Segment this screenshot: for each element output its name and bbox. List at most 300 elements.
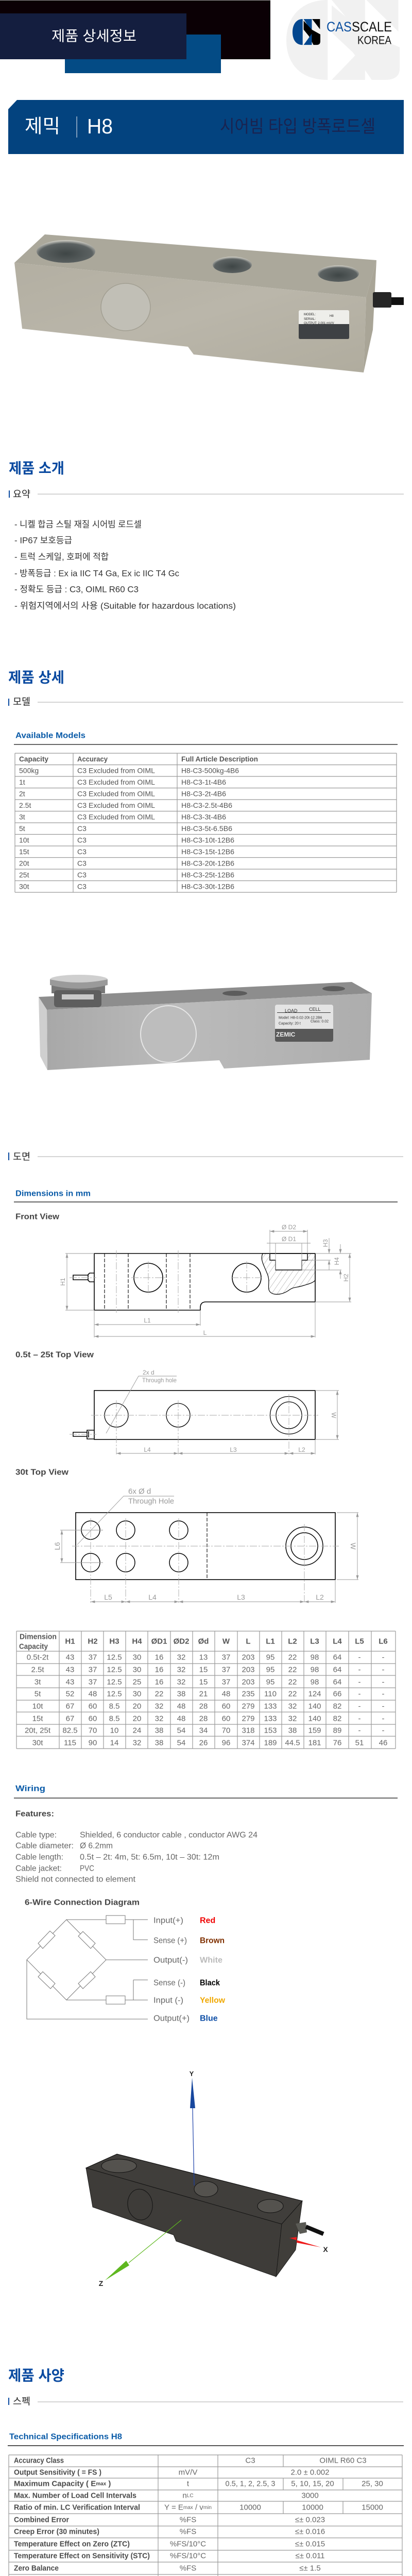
units column: Y = Emax / vmin bbox=[164, 2503, 212, 2512]
front view label: Front View bbox=[15, 1213, 60, 1221]
row 3t: 15 bbox=[199, 1677, 208, 1687]
table rows: H8-C3-2.5t-4B6 bbox=[181, 801, 232, 809]
cable features list: Cable type: bbox=[15, 1831, 57, 1839]
wire colours: Black bbox=[200, 1978, 220, 1988]
row 15t: 140 bbox=[308, 1715, 321, 1723]
row 15t: 20 bbox=[133, 1715, 141, 1723]
table rows: C3 Excluded from OIML bbox=[77, 813, 155, 821]
dimension lines bbox=[60, 1513, 358, 1603]
centre lines bbox=[70, 1250, 263, 1313]
logo korea: KOREA bbox=[357, 34, 391, 46]
row 10t: 20 bbox=[133, 1702, 141, 1710]
summary bullet list: - 니켈 합금 스틸 재질 시어빔 로드셀 bbox=[14, 519, 142, 530]
row 30t: 14 bbox=[110, 1738, 118, 1748]
units column: %FS/10°C bbox=[170, 2551, 206, 2561]
row 20t, 25t: 38 bbox=[288, 1726, 297, 1735]
row 5t: 52 bbox=[66, 1690, 74, 1698]
hidden line bbox=[207, 1513, 208, 1580]
cable features list: Ø 6.2mm bbox=[80, 1841, 113, 1851]
row 10t: 28 bbox=[199, 1702, 208, 1710]
row 15t: 133 bbox=[264, 1715, 277, 1723]
row labels: Temperature Effect on Zero (ZTC) bbox=[14, 2540, 130, 2548]
wire colours: Red bbox=[200, 1917, 215, 1925]
row 3t: 37 bbox=[222, 1677, 230, 1687]
table rows: 500kg bbox=[19, 767, 39, 775]
nameplate: OUTPUT: 2.001 mV/V bbox=[304, 322, 334, 325]
holes bbox=[81, 1521, 323, 1572]
values column: 2.0 ± 0.002 bbox=[291, 2468, 329, 2477]
row 10t: 60 bbox=[222, 1702, 230, 1710]
subheading: summary: 요약 bbox=[13, 488, 30, 500]
dimension labels: H4 bbox=[333, 1257, 340, 1265]
wire colours: Yellow bbox=[200, 1996, 226, 2005]
row 0.5t-2t: 22 bbox=[288, 1653, 297, 1662]
dimension labels: L4 bbox=[144, 1446, 151, 1453]
row 10t: 67 bbox=[66, 1702, 74, 1710]
company logo bbox=[293, 19, 392, 46]
nameplate: H8 bbox=[330, 315, 334, 318]
row 0.5t-2t: 12.5 bbox=[107, 1653, 122, 1662]
nameplate: SERIAL: bbox=[304, 318, 316, 321]
6-wire connection diagram bbox=[27, 1916, 226, 2023]
cable features list bbox=[15, 1831, 258, 1884]
dimension lines bbox=[315, 1391, 339, 1454]
row 5t: 48 bbox=[222, 1690, 230, 1698]
dimension labels: L1 bbox=[144, 1317, 151, 1324]
technical specifications table bbox=[9, 2455, 402, 2576]
holes bbox=[37, 240, 359, 282]
header row bbox=[19, 1632, 388, 1651]
row 2.5t: - bbox=[358, 1665, 360, 1674]
table rows: C3 bbox=[77, 824, 87, 833]
table rows: H8-C3-20t-12B6 bbox=[181, 859, 234, 868]
X axis arrow: X bbox=[323, 2245, 328, 2253]
row 0.5t-2t bbox=[27, 1653, 384, 1662]
row 30t: 115 bbox=[64, 1738, 76, 1748]
row 3t: 22 bbox=[288, 1677, 297, 1687]
row 30t: 76 bbox=[333, 1738, 341, 1748]
row 5t: 48 bbox=[89, 1690, 97, 1698]
table rows: 10t bbox=[19, 836, 29, 844]
row 10t: 32 bbox=[155, 1702, 163, 1710]
row 5t: 5t bbox=[35, 1690, 41, 1698]
cable features list: Cable jacket: bbox=[15, 1864, 62, 1873]
dimension labels: H3 bbox=[322, 1239, 329, 1247]
row 20t, 25t: 34 bbox=[199, 1726, 208, 1735]
cable features list: 0.5t – 2t: 4m, 5t: 6.5m, 10t – 30t: 12m bbox=[80, 1853, 219, 1862]
row 0.5t-2t: 43 bbox=[66, 1653, 74, 1662]
row 15t: 15t bbox=[32, 1715, 43, 1723]
wire labels: Sense (+) bbox=[153, 1936, 187, 1945]
row 3t: - bbox=[358, 1677, 360, 1687]
table rows: 30t bbox=[19, 882, 29, 890]
row 15t: - bbox=[382, 1715, 384, 1723]
values column: 10000 bbox=[239, 2503, 261, 2512]
values column: ≤± 0.023 bbox=[295, 2515, 325, 2524]
row 0.5t-2t: 64 bbox=[333, 1653, 341, 1662]
row 2.5t: 64 bbox=[333, 1665, 341, 1674]
features heading: Features: bbox=[15, 1809, 54, 1819]
dimensions heading: Dimensions in mm bbox=[15, 1189, 91, 1198]
row 15t: 32 bbox=[155, 1715, 163, 1723]
body outline bbox=[76, 1513, 335, 1580]
units column: nLC bbox=[182, 2492, 194, 2500]
strain cover bbox=[141, 1006, 196, 1062]
row 0.5t-2t: 32 bbox=[177, 1653, 185, 1662]
row 20t, 25t: 10 bbox=[110, 1726, 118, 1735]
block right face bbox=[276, 2201, 302, 2277]
row 15t: 32 bbox=[288, 1715, 297, 1723]
cable features list: Shield not connected to element bbox=[15, 1875, 136, 1884]
row 20t, 25t: 318 bbox=[242, 1726, 255, 1735]
summary bullet list: - 위험지역에서의 사용 (Suitable for hazardous locations) bbox=[14, 601, 236, 611]
units column: %FS/10°C bbox=[170, 2540, 206, 2548]
row 2.5t: 32 bbox=[177, 1665, 185, 1674]
row 30t: 54 bbox=[177, 1738, 185, 1748]
available models heading: Available Models bbox=[15, 732, 85, 740]
subheading: model: 모델 bbox=[13, 697, 30, 707]
row 2.5t: 43 bbox=[66, 1665, 74, 1674]
row 20t, 25t: - bbox=[358, 1726, 360, 1735]
row labels: Output Sensitivity ( = FS ) bbox=[14, 2468, 101, 2477]
table rows: H8-C3-15t-12B6 bbox=[181, 848, 234, 856]
row 5t: 30 bbox=[133, 1690, 141, 1698]
row 15t: 67 bbox=[66, 1715, 74, 1723]
row 30t: 189 bbox=[264, 1738, 277, 1748]
cable features list: Shielded, 6 conductor cable , conductor AWG 24 bbox=[80, 1831, 258, 1839]
body outline bbox=[94, 1253, 315, 1310]
strain cover outline bbox=[126, 2188, 154, 2222]
values column: 25, 30 bbox=[362, 2479, 383, 2488]
dimension labels bbox=[53, 1487, 357, 1601]
row 10t: 140 bbox=[308, 1702, 321, 1710]
values column: ≤± 0.011 bbox=[295, 2551, 325, 2561]
row 10t: 32 bbox=[288, 1702, 297, 1710]
model name: H8 bbox=[87, 114, 113, 138]
nameplate: Class: 0.02 bbox=[311, 1020, 329, 1023]
row 10t bbox=[32, 1702, 384, 1710]
table header: Full Article Description bbox=[181, 755, 258, 763]
dimension labels: W bbox=[349, 1543, 357, 1550]
product photo: grayscale load cell with pin bbox=[39, 975, 372, 1070]
values column bbox=[220, 2456, 401, 2576]
table rows: H8-C3-500kg-4B6 bbox=[181, 767, 239, 775]
row 10t: 8.5 bbox=[109, 1702, 119, 1710]
hatched section bbox=[262, 1253, 315, 1294]
dimension labels: 6x Ø d bbox=[128, 1487, 151, 1496]
nameplate: MODEL: bbox=[304, 313, 316, 316]
summary bullet list bbox=[14, 519, 236, 611]
Z axis arrow bbox=[99, 2220, 181, 2287]
row 15t: 60 bbox=[222, 1715, 230, 1723]
dimension labels: H2 bbox=[342, 1274, 350, 1282]
row 20t, 25t: 70 bbox=[89, 1726, 97, 1735]
row 20t, 25t: 153 bbox=[264, 1726, 277, 1735]
leader bbox=[77, 1496, 174, 1545]
header row: L4 bbox=[333, 1637, 342, 1646]
block top face bbox=[86, 2154, 302, 2224]
values column: ≤± 0.016 bbox=[295, 2528, 325, 2536]
0.5t-25t top view drawing bbox=[70, 1369, 339, 1454]
row 3t bbox=[35, 1677, 384, 1687]
row 15t: 82 bbox=[333, 1715, 341, 1723]
row labels: Ratio of min. LC Verification Interval bbox=[14, 2503, 140, 2512]
row 30t: 38 bbox=[155, 1738, 163, 1748]
dimension labels: L bbox=[203, 1329, 207, 1336]
nameplate: ZEMIC bbox=[276, 1031, 296, 1038]
holes bbox=[105, 1396, 308, 1434]
wire labels: Output(+) bbox=[153, 2014, 190, 2023]
nameplate: LOAD bbox=[285, 1008, 298, 1013]
wire labels: Sense (-) bbox=[153, 1978, 185, 1988]
table header bbox=[19, 755, 258, 763]
row 20t, 25t: 82.5 bbox=[62, 1726, 78, 1735]
row 3t: 12.5 bbox=[107, 1677, 122, 1687]
table rows: C3 bbox=[77, 871, 87, 879]
dimension labels bbox=[142, 1369, 337, 1453]
counterbore bbox=[270, 1253, 307, 1270]
row 3t: - bbox=[382, 1677, 384, 1687]
row 3t: 32 bbox=[177, 1677, 185, 1687]
nameplate: Model: H8-0.02-20t-12.2B6 bbox=[279, 1016, 322, 1020]
header row: H2 bbox=[88, 1637, 98, 1646]
leader bbox=[106, 1376, 177, 1433]
row labels: Maximum Capacity ( Emax ) bbox=[14, 2479, 111, 2488]
0.5t-25t top view label: 0.5t – 25t Top View bbox=[15, 1351, 94, 1359]
row 2.5t bbox=[31, 1665, 384, 1674]
table rows: 2t bbox=[19, 789, 25, 798]
table rows: 20t bbox=[19, 859, 29, 868]
Y axis arrow bbox=[190, 2070, 195, 2185]
row 3t: 25 bbox=[133, 1677, 141, 1687]
holes bbox=[222, 986, 345, 996]
dimension labels: 2x d bbox=[143, 1369, 154, 1376]
table rows: C3 Excluded from OIML bbox=[77, 801, 155, 809]
centre lines bbox=[70, 1394, 318, 1454]
table rows: C3 Excluded from OIML bbox=[77, 789, 155, 798]
top face bbox=[39, 982, 372, 1010]
front face bbox=[47, 993, 372, 1070]
row 2.5t: - bbox=[382, 1665, 384, 1674]
row 5t: 22 bbox=[155, 1690, 163, 1698]
row 15t: 8.5 bbox=[109, 1715, 119, 1723]
summary bullet list: - 트럭 스케일, 호퍼에 적합 bbox=[14, 552, 109, 562]
hidden lines bbox=[105, 1253, 190, 1310]
6-wire diagram heading: 6-Wire Connection Diagram bbox=[25, 1898, 140, 1907]
units column: mV/V bbox=[179, 2468, 197, 2477]
row 0.5t-2t: - bbox=[358, 1653, 360, 1662]
row 0.5t-2t: 203 bbox=[242, 1653, 255, 1662]
row 5t: - bbox=[382, 1690, 384, 1698]
row 30t: 32 bbox=[133, 1738, 141, 1748]
header banner bbox=[0, 0, 270, 73]
table header: Accuracy bbox=[77, 755, 108, 763]
header row: L2 bbox=[288, 1637, 297, 1646]
values column: 0.5, 1, 2, 2.5, 3 bbox=[226, 2479, 275, 2488]
row 0.5t-2t: 95 bbox=[266, 1653, 274, 1662]
row 15t: - bbox=[358, 1715, 360, 1723]
values column: ≤± 1.5 bbox=[299, 2564, 321, 2573]
3D axis model bbox=[86, 2070, 328, 2287]
row 3t: 3t bbox=[35, 1677, 41, 1687]
subtitle: 시어빔 타입 방폭로드셀 bbox=[220, 117, 375, 137]
block front face bbox=[86, 2168, 282, 2277]
row 20t, 25t: 20t, 25t bbox=[25, 1726, 51, 1735]
30t top view label: 30t Top View bbox=[15, 1468, 69, 1477]
X axis arrow bbox=[289, 2237, 328, 2253]
table rows: H8-C3-5t-6.5B6 bbox=[181, 824, 232, 833]
row 3t: 64 bbox=[333, 1677, 341, 1687]
header row: L6 bbox=[379, 1637, 388, 1646]
left face bbox=[39, 997, 47, 1070]
Y axis arrow: Y bbox=[190, 2070, 194, 2077]
row 10t: 48 bbox=[177, 1702, 185, 1710]
header row: L3 bbox=[310, 1637, 319, 1646]
header row: ØD1 bbox=[151, 1637, 167, 1646]
values column: ≤± 0.015 bbox=[295, 2540, 325, 2548]
table rows: 25t bbox=[19, 871, 29, 879]
row 2.5t: 37 bbox=[89, 1665, 97, 1674]
header row: Dimension bbox=[20, 1632, 57, 1641]
row labels: Temperature Effect on Sensitivity (STC) bbox=[14, 2551, 150, 2561]
row labels: Max. Number of Load Cell Intervals bbox=[14, 2492, 136, 2500]
table rows: C3 Excluded from OIML bbox=[77, 778, 155, 786]
row 2.5t: 37 bbox=[222, 1665, 230, 1674]
side holes bbox=[134, 1263, 261, 1292]
title bar bbox=[8, 100, 404, 154]
table rows: C3 bbox=[77, 882, 87, 890]
row labels: Combined Error bbox=[14, 2515, 69, 2524]
dimension labels: H1 bbox=[59, 1278, 66, 1286]
row 30t: 46 bbox=[379, 1738, 387, 1748]
row 5t: 22 bbox=[288, 1690, 297, 1698]
row 3t: 37 bbox=[89, 1677, 97, 1687]
row 0.5t-2t: 30 bbox=[133, 1653, 141, 1662]
load pin bbox=[50, 975, 108, 1007]
header row: L bbox=[246, 1637, 251, 1646]
row 5t: 38 bbox=[177, 1690, 185, 1698]
row 30t bbox=[32, 1738, 387, 1748]
table rows: H8-C3-2t-4B6 bbox=[181, 789, 226, 798]
logo wordmark: CASSCALE bbox=[327, 19, 392, 35]
row 5t: - bbox=[358, 1690, 360, 1698]
row 10t: - bbox=[358, 1702, 360, 1710]
row 2.5t: 95 bbox=[266, 1665, 274, 1674]
row 3t: 98 bbox=[311, 1677, 319, 1687]
row 20t, 25t: 159 bbox=[308, 1726, 321, 1735]
dimension labels: Ø D1 bbox=[282, 1235, 296, 1243]
dimension labels: L2 bbox=[316, 1593, 324, 1601]
table rows: C3 bbox=[77, 848, 87, 856]
row labels: Accuracy Class bbox=[14, 2456, 64, 2465]
row 2.5t: 12.5 bbox=[107, 1665, 122, 1674]
subheading: drawing: 도면 bbox=[13, 1151, 30, 1162]
row 15t bbox=[32, 1715, 384, 1723]
row 5t: 12.5 bbox=[107, 1690, 122, 1698]
row 0.5t-2t: 37 bbox=[89, 1653, 97, 1662]
row 30t: 44.5 bbox=[285, 1738, 300, 1748]
row 0.5t-2t: - bbox=[382, 1653, 384, 1662]
row 10t: 82 bbox=[333, 1702, 341, 1710]
wire colours: White bbox=[200, 1956, 222, 1965]
dimension labels: L3 bbox=[230, 1446, 237, 1453]
wire labels: Input (-) bbox=[153, 1996, 183, 2005]
section heading: product detail: 제품 상세 bbox=[8, 670, 64, 685]
nameplate bbox=[299, 310, 349, 339]
row 5t: 110 bbox=[264, 1690, 277, 1698]
row 5t: 124 bbox=[308, 1690, 321, 1698]
row 2.5t: 2.5t bbox=[31, 1665, 44, 1674]
top face bbox=[14, 234, 376, 297]
row labels bbox=[14, 2456, 153, 2576]
nameplate: Capacity: 20 t bbox=[279, 1022, 301, 1025]
front face bbox=[14, 263, 366, 372]
values column: 3000 bbox=[301, 2492, 319, 2500]
row 2.5t: 15 bbox=[199, 1665, 208, 1674]
product photo: H8 load cell bbox=[14, 234, 404, 372]
values column: 15000 bbox=[362, 2503, 383, 2512]
table rows: 2.5t bbox=[19, 801, 31, 809]
dimension labels: W bbox=[330, 1412, 337, 1418]
subheading: spec: 스펙 bbox=[13, 2396, 30, 2407]
header row: Capacity bbox=[19, 1642, 48, 1651]
values column: C3 bbox=[245, 2456, 255, 2465]
row 0.5t-2t: 0.5t-2t bbox=[27, 1653, 49, 1662]
row 3t: 95 bbox=[266, 1677, 274, 1687]
row 20t, 25t: 89 bbox=[333, 1726, 341, 1735]
row 30t: 26 bbox=[199, 1738, 208, 1748]
row 20t, 25t bbox=[25, 1726, 384, 1735]
row 20t, 25t: - bbox=[382, 1726, 384, 1735]
row 3t: 203 bbox=[242, 1677, 255, 1687]
row 2.5t: 16 bbox=[155, 1665, 163, 1674]
table rows: H8-C3-10t-12B6 bbox=[181, 836, 234, 844]
header title: 제품 상세정보 bbox=[52, 28, 136, 44]
dimension labels: L6 bbox=[53, 1542, 61, 1550]
row 30t: 90 bbox=[89, 1738, 97, 1748]
units column: %FS bbox=[180, 2528, 196, 2536]
cable gland bbox=[373, 292, 404, 308]
row labels: Creep Error (30 minutes) bbox=[14, 2528, 99, 2536]
row 15t: 28 bbox=[199, 1715, 208, 1723]
section heading: product intro: 제품 소개 bbox=[9, 461, 64, 476]
header row: H3 bbox=[109, 1637, 119, 1646]
units column bbox=[164, 2468, 212, 2576]
row 30t: 181 bbox=[308, 1738, 321, 1748]
technical specifications heading: Technical Specifications H8 bbox=[9, 2433, 122, 2441]
row 0.5t-2t: 16 bbox=[155, 1653, 163, 1662]
logo watermark bbox=[286, 0, 400, 80]
wire labels bbox=[153, 1917, 190, 2023]
table rows: 3t bbox=[19, 813, 25, 821]
row 2.5t: 203 bbox=[242, 1665, 255, 1674]
table rows: H8-C3-1t-4B6 bbox=[181, 778, 226, 786]
row 20t, 25t: 24 bbox=[133, 1726, 141, 1735]
row 0.5t-2t: 13 bbox=[199, 1653, 208, 1662]
row 5t: 235 bbox=[242, 1690, 255, 1698]
table rows: C3 Excluded from OIML bbox=[77, 767, 155, 775]
dimension labels: L4 bbox=[148, 1593, 157, 1601]
row 15t: 60 bbox=[89, 1715, 97, 1723]
values column: 10000 bbox=[302, 2503, 323, 2512]
table rows: H8-C3-30t-12B6 bbox=[181, 882, 234, 890]
available models table bbox=[15, 753, 397, 892]
resistors bbox=[38, 1916, 125, 2004]
cable connector bbox=[73, 1273, 94, 1282]
logo mark bbox=[293, 19, 320, 45]
nameplate bbox=[275, 1005, 333, 1042]
header row: L1 bbox=[266, 1637, 275, 1646]
